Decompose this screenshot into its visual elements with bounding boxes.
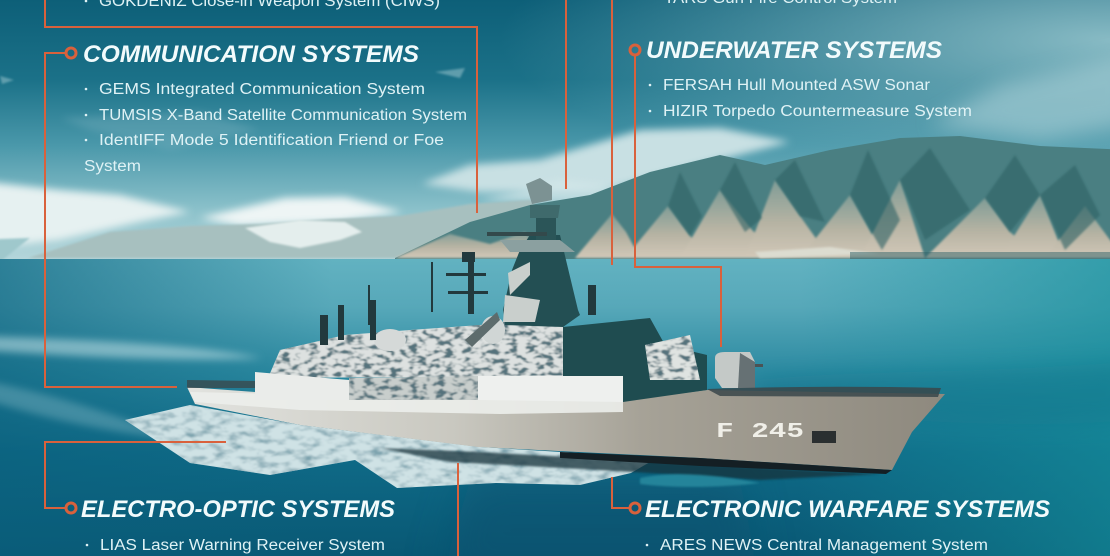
panel: electro-optic systems bbox=[81, 496, 395, 554]
main gun bbox=[715, 352, 755, 388]
hull bbox=[187, 387, 945, 470]
heading: ELECTRONIC WARFARE SYSTEMS bbox=[645, 496, 1050, 523]
node: underwater bbox=[630, 45, 640, 55]
list: LIAS Laser Warning Receiver System bbox=[100, 537, 385, 554]
sky background bbox=[0, 0, 1110, 264]
heading: ELECTRO-OPTIC SYSTEMS bbox=[81, 496, 395, 523]
connector lines bbox=[45, 0, 721, 556]
bow wake and foam bbox=[125, 405, 880, 488]
main tower bbox=[503, 235, 580, 327]
list: GEMS Integrated Communication System bbox=[99, 81, 425, 98]
details bbox=[374, 329, 406, 351]
panel: electronic warfare systems bbox=[645, 496, 1050, 554]
list: ARES NEWS Central Management System bbox=[660, 537, 988, 554]
node: communication bbox=[66, 48, 76, 58]
list: HIZIR Torpedo Countermeasure System bbox=[663, 103, 972, 120]
deck rail bbox=[187, 380, 255, 388]
frigate F 245 bbox=[187, 178, 945, 474]
panel: communication systems bbox=[83, 41, 467, 175]
node: electro-optic bbox=[66, 503, 76, 513]
list: IdentIFF Mode 5 Identification Friend or Foe bbox=[99, 132, 444, 149]
heading: UNDERWATER SYSTEMS bbox=[646, 37, 942, 64]
mountains bbox=[28, 136, 1110, 260]
list: System bbox=[84, 158, 141, 175]
panel: underwater systems bbox=[646, 37, 972, 120]
heading: COMMUNICATION SYSTEMS bbox=[83, 41, 419, 68]
ridge faces bbox=[395, 180, 1110, 258]
superstructure bbox=[268, 315, 563, 378]
second mast bbox=[320, 252, 596, 345]
list bbox=[84, 81, 467, 175]
list: FERSAH Hull Mounted ASW Sonar bbox=[663, 77, 930, 94]
list: TUMSIS X-Band Satellite Communication System bbox=[99, 107, 467, 124]
far left pale range bbox=[28, 200, 600, 258]
list bbox=[649, 77, 972, 120]
clouds bbox=[0, 55, 1110, 262]
waterline shadow bbox=[560, 452, 892, 474]
main range bbox=[395, 136, 1110, 260]
node: electronic warfare bbox=[630, 503, 640, 513]
hull number: F 245 bbox=[716, 421, 804, 444]
sea bbox=[0, 259, 1110, 556]
